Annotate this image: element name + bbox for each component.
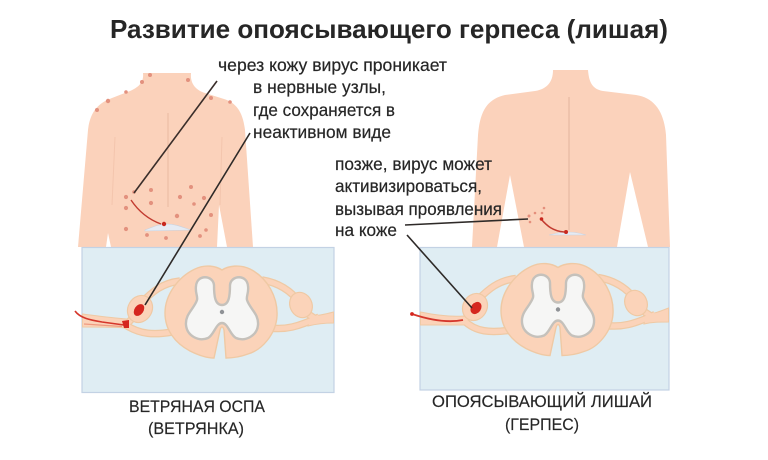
right panel: spinal cord cross-section, shingles bbox=[410, 248, 669, 390]
caption: chickenpox bbox=[129, 398, 265, 438]
red virus in ganglion bbox=[132, 302, 146, 318]
caption: shingles: (ГЕРПЕС) bbox=[505, 416, 579, 434]
caption: chickenpox: ВЕТРЯНАЯ ОСПА bbox=[129, 398, 265, 416]
annotation: virus enters nerve nodes bbox=[218, 55, 447, 142]
red arrow bbox=[541, 219, 564, 232]
left panel: spinal cord cross-section, chickenpox bbox=[75, 248, 334, 392]
grey matter bbox=[186, 277, 258, 339]
right nerve trunk bbox=[308, 312, 334, 326]
rash dots bbox=[95, 73, 232, 240]
leader line: text to right ganglion bbox=[407, 235, 472, 308]
nerve roots bbox=[124, 280, 319, 334]
white spinal slice bbox=[549, 232, 586, 235]
red virus in ganglion bbox=[468, 300, 484, 316]
annotation: virus enters nerve nodes: неактивном виде bbox=[253, 122, 391, 142]
rash dots bbox=[528, 207, 545, 223]
spinal cord bbox=[501, 264, 613, 356]
central canal bbox=[556, 307, 560, 312]
leader line: skin to rash bbox=[134, 81, 217, 193]
title: Развитие опоясывающего герпеса (лишая) bbox=[110, 14, 668, 44]
white spinal slice bbox=[145, 224, 191, 231]
right nerve trunk bbox=[644, 308, 668, 324]
annotation: virus may reactivate: позже, вирус может bbox=[335, 154, 492, 174]
leader line: text to left ganglion bbox=[145, 133, 250, 305]
red nerve path bbox=[412, 314, 463, 321]
annotation: virus enters nerve nodes: через кожу вирус проникает bbox=[218, 55, 447, 75]
left nerve trunk bbox=[82, 314, 129, 328]
left nerve trunk bbox=[420, 312, 466, 325]
red arrow bbox=[131, 200, 161, 224]
spinal cord bbox=[165, 266, 277, 358]
annotation: virus may reactivate: на коже bbox=[335, 220, 397, 240]
caption: chickenpox: (ВЕТРЯНКА) bbox=[148, 420, 244, 438]
grey matter bbox=[522, 275, 594, 337]
annotation: virus enters nerve nodes: где сохраняется в bbox=[253, 100, 395, 120]
left figure: back with widespread rash bbox=[78, 73, 253, 247]
right figure: back with local rash bbox=[472, 70, 670, 247]
annotation: virus enters nerve nodes: в нервные узлы, bbox=[253, 77, 386, 97]
ganglia bbox=[458, 289, 492, 325]
annotation: virus may reactivate: активизироваться, bbox=[335, 176, 482, 196]
annotation: virus may reactivate bbox=[335, 154, 502, 240]
nerve roots bbox=[464, 278, 655, 331]
caption: shingles: ОПОЯСЫВАЮЩИЙ ЛИШАЙ bbox=[432, 392, 652, 411]
central canal bbox=[220, 310, 224, 314]
ganglia bbox=[123, 291, 157, 327]
annotation: virus may reactivate: вызывая проявления bbox=[335, 199, 502, 219]
caption: shingles bbox=[432, 392, 652, 434]
leader line: text to right rash bbox=[405, 219, 528, 225]
red nerve path bbox=[75, 311, 124, 325]
